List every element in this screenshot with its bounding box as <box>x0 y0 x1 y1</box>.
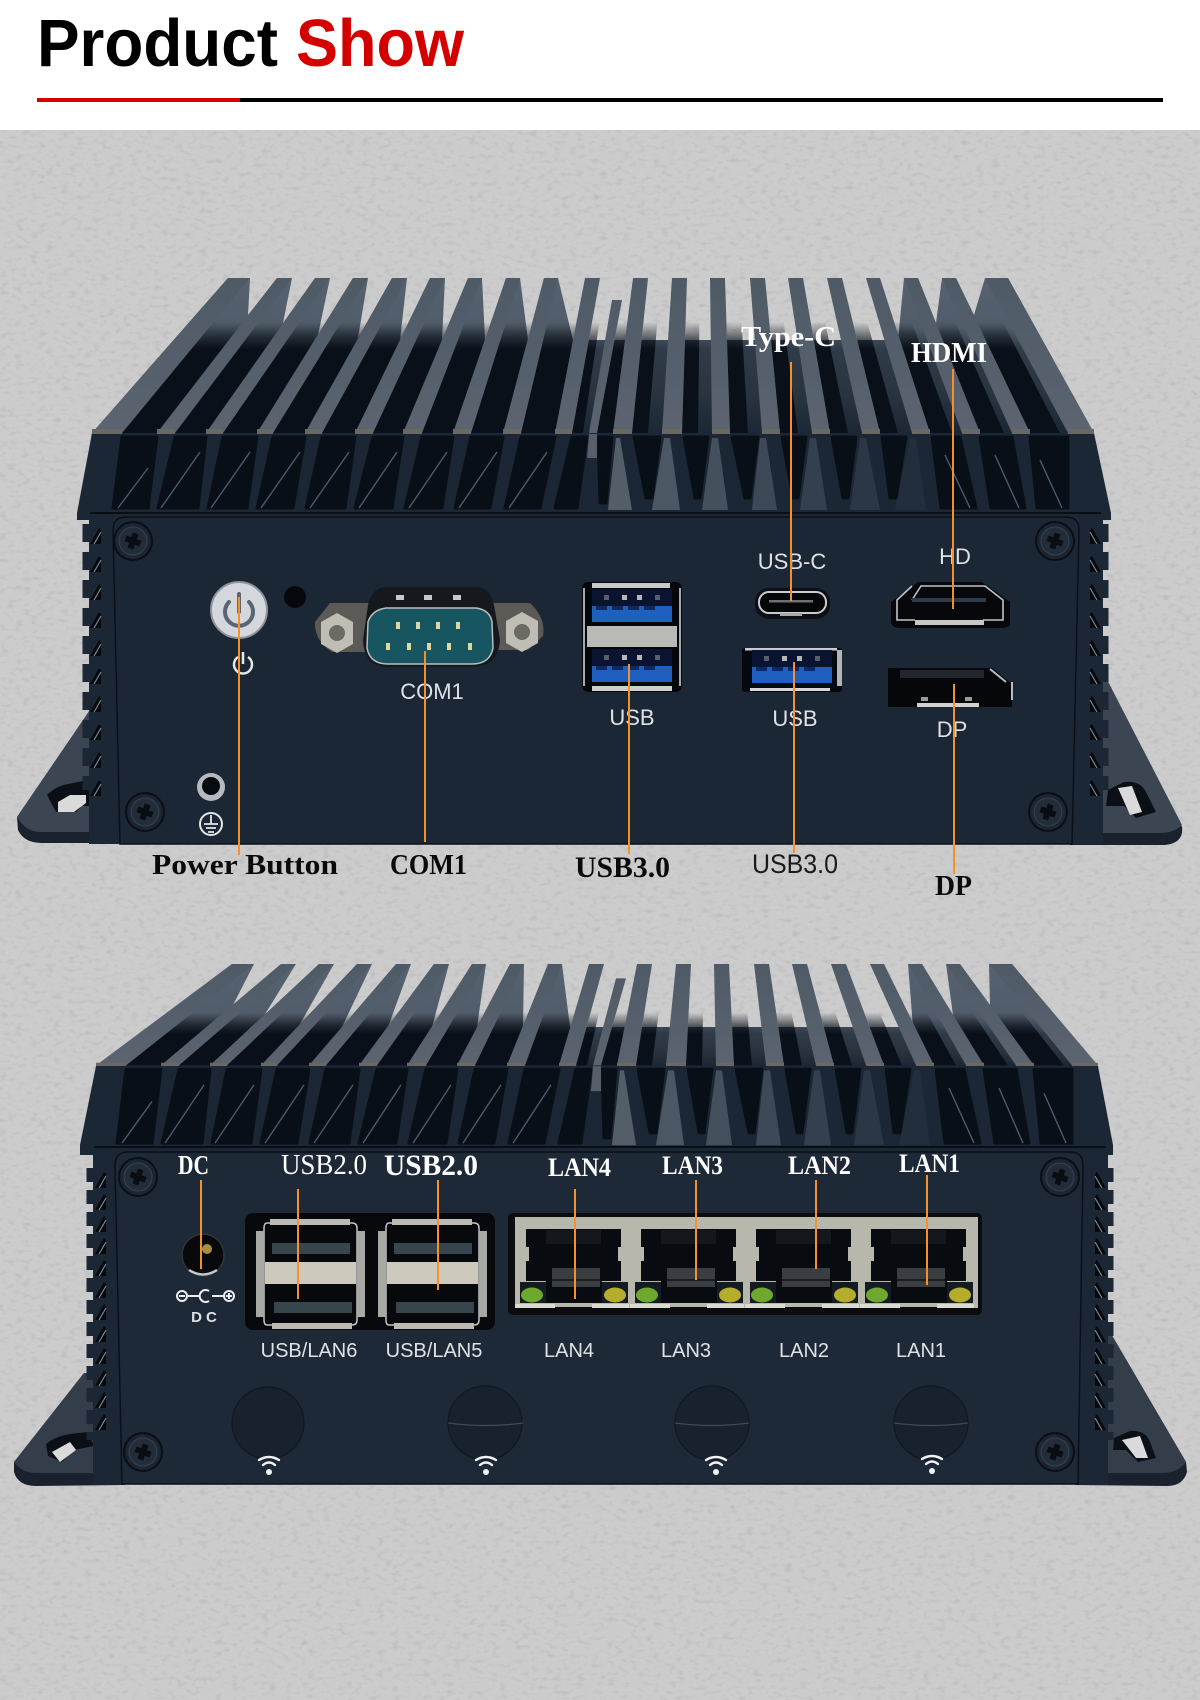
printed port labels: LAN2 <box>779 1340 829 1362</box>
panel screws <box>119 1158 1079 1471</box>
callout: LAN4: LAN4 <box>548 1153 611 1182</box>
heat sink <box>77 278 1111 520</box>
callout: USB3.0 left: USB3.0 <box>575 851 670 884</box>
printed label: USB: USB <box>609 705 655 730</box>
right mounting foot <box>1070 666 1182 845</box>
DC power jack <box>182 1234 224 1276</box>
callout: LAN3 <box>662 1151 723 1280</box>
callout: USB3.0 right: USB3.0 <box>752 849 838 879</box>
callout: DP: DP <box>935 870 972 902</box>
left mounting foot <box>17 707 122 843</box>
printed port labels: LAN4 <box>544 1340 594 1362</box>
ground terminal <box>197 773 225 835</box>
callout: DC: DC <box>178 1150 209 1180</box>
title <box>37 6 465 81</box>
printed label: HD: HD <box>939 544 971 569</box>
callout: LAN1 <box>899 1149 960 1285</box>
front panel <box>113 517 1079 844</box>
printed port labels: USB/LAN6 <box>261 1340 357 1362</box>
printed label: COM1: COM1 <box>400 679 464 704</box>
callout: LAN2 <box>788 1151 851 1269</box>
printed label: USB-C: USB-C <box>758 549 826 574</box>
wifi icons <box>259 1456 942 1475</box>
LAN port block <box>508 1213 982 1315</box>
left mounting foot <box>14 1373 124 1486</box>
callout: Type-C: Type-C <box>741 321 836 353</box>
DisplayPort port <box>888 668 1012 707</box>
DC polarity symbol <box>177 1290 234 1302</box>
single USB 3.0 port <box>742 648 842 692</box>
device: rear view <box>14 964 1187 1486</box>
antenna mounts <box>232 1386 968 1460</box>
USB 2.0 port stack <box>245 1213 495 1330</box>
rear panel <box>115 1152 1083 1484</box>
printed label: DC: DC <box>191 1309 221 1326</box>
callout: LAN2: LAN2 <box>788 1151 851 1180</box>
device: front view <box>17 278 1182 902</box>
title: Show <box>296 6 465 81</box>
callout: HDMI: HDMI <box>911 338 987 369</box>
panel screws <box>114 522 1074 831</box>
callout: USB2.0 right: USB2.0 <box>384 1149 478 1182</box>
USB-C port <box>755 588 830 619</box>
side heat fins <box>90 1145 1110 1485</box>
printed label: USB: USB <box>772 706 818 731</box>
printed label: DP: DP <box>937 717 967 742</box>
heat sink <box>80 964 1113 1155</box>
dual USB 3.0 port <box>582 582 682 692</box>
HDMI port <box>891 582 1010 628</box>
power button <box>211 582 306 673</box>
printed port labels: USB/LAN5 <box>386 1340 482 1362</box>
side heat fins <box>86 510 1105 844</box>
printed port labels <box>261 1340 946 1362</box>
callout: LAN1: LAN1 <box>899 1149 960 1178</box>
title: Product <box>37 6 278 81</box>
title underline <box>37 98 1163 102</box>
callout: USB2.0 left: USB2.0 <box>281 1150 367 1181</box>
callout: COM1: COM1 <box>390 849 467 881</box>
printed port labels: LAN3 <box>661 1340 711 1362</box>
COM1 serial port <box>315 587 543 667</box>
callout: Power Button: Power Button <box>152 849 338 881</box>
right mounting foot <box>1075 1332 1187 1486</box>
printed port labels: LAN1 <box>896 1340 946 1362</box>
callout: LAN3: LAN3 <box>662 1151 723 1180</box>
callout: DC <box>178 1150 209 1269</box>
